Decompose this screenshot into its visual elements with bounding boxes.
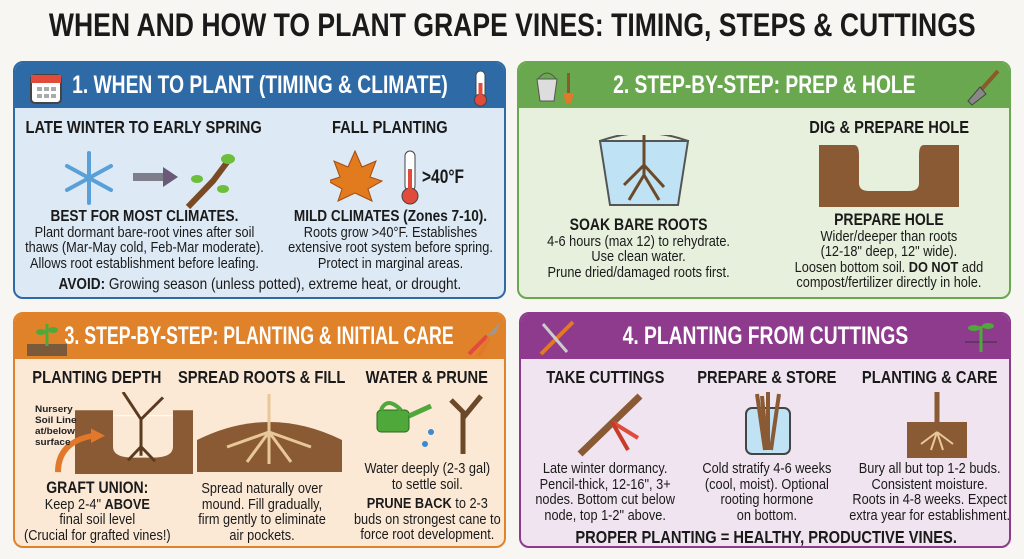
panel: planting from cuttings [519, 312, 1011, 548]
text: spread roots [198, 480, 326, 544]
icon: thermometer header [474, 70, 487, 106]
icon: seedling header right [965, 323, 997, 352]
header: cuttings [441, 314, 1024, 359]
text: soak bare roots [547, 216, 730, 280]
text: spread roots: Spread naturally over [201, 480, 323, 497]
text: prepare hole: Wider/deeper than roots [821, 228, 957, 244]
subheading: dig and prepare hole: DIG & PREPARE HOLE [809, 117, 969, 137]
text: graft union: GRAFT UNION: [46, 479, 148, 497]
header: planting and initial care [0, 314, 584, 359]
text: water and prune: buds on strongest cane to [354, 510, 500, 528]
text: best for most climates [25, 208, 263, 272]
icon: cutting in soil [907, 392, 967, 458]
text: water and prune: to settle soil. [392, 476, 462, 492]
text: take cuttings: nodes. Bottom cut below [535, 491, 675, 508]
text: mild climates: Roots grow >40°F. Establishes [303, 224, 477, 240]
text: planting and care: Roots in 4-8 weeks. Expect [853, 491, 1007, 508]
subheading: take cuttings: TAKE CUTTINGS [546, 367, 664, 387]
icon: watering can and cane [376, 394, 483, 454]
icon: shovel header [967, 70, 1000, 106]
text: mild climates [288, 208, 492, 272]
icon: cane and pruners [578, 394, 642, 456]
icon: mound with roots [197, 394, 342, 472]
header: when to plant: 1. WHEN TO PLANT (TIMING & CLIMATE) [72, 71, 447, 99]
icon: jar with cuttings [745, 392, 791, 455]
panel: when to plant [13, 61, 506, 299]
text: water and prune: Water deeply (2-3 gal) [364, 460, 490, 477]
icon: calendar [30, 74, 62, 104]
text: planting and care: Bury all but top 1-2 buds. [859, 460, 1001, 477]
text: planting and care [850, 460, 1010, 524]
header: planting and initial care: 3. STEP-BY-STEP: PLANTING & INITIAL CARE [65, 322, 454, 350]
icon: snowflake arrow branch [64, 151, 235, 209]
text: best for most climates: Plant dormant bare-root vines after soil [34, 224, 254, 240]
icon: pruners header left [540, 320, 574, 356]
text: soak bare roots: SOAK BARE ROOTS [570, 216, 708, 234]
text: prepare and store [703, 460, 831, 524]
subheading: water and prune: WATER & PRUNE [366, 367, 488, 387]
text: soak bare roots: Use clean water. [592, 248, 686, 265]
text: proper planting: PROPER PLANTING = HEALTHY, PRODUCTIVE VINES. [575, 527, 957, 547]
text: prepare and store: (cool, moist). Optional [705, 476, 829, 492]
text: water and prune: to 2-3 [455, 495, 488, 512]
panel: prep and hole [517, 61, 1011, 299]
subheading: fall planting: FALL PLANTING [332, 117, 448, 137]
text: water and prune: force root development. [360, 526, 494, 543]
icon: bucket header [536, 72, 574, 103]
icon: planting depth diagram: Nursery [35, 404, 73, 415]
icon: planting depth diagram [35, 392, 193, 474]
subheading: late winter: LATE WINTER TO EARLY SPRING [26, 117, 262, 137]
text: spread roots: mound. Fill gradually, [202, 496, 322, 512]
text: take cuttings [535, 460, 675, 524]
text: spread roots: air pockets. [229, 526, 295, 544]
text: mild climates: extensive root system before spring. [288, 239, 492, 256]
header: when to plant [0, 63, 584, 108]
icon: sprout header [27, 324, 67, 356]
text: planting and care: extra year for establishment. [850, 506, 1010, 524]
text: prepare hole: compost/fertilizer directly in hole. [797, 274, 981, 291]
icon: planting depth diagram: Soil Line [35, 415, 77, 426]
text: graft union [24, 479, 170, 544]
text: soak bare roots: 4-6 hours (max 12) to rehydrate. [548, 232, 730, 250]
header: cuttings: 4. PLANTING FROM CUTTINGS [622, 322, 908, 350]
text: prepare hole [795, 211, 983, 291]
subheading: prepare and store: PREPARE & STORE [697, 367, 837, 387]
text: spread roots: firm gently to eliminate [198, 511, 326, 528]
subheading: spread roots: SPREAD ROOTS & FILL [178, 367, 346, 387]
text: soak bare roots: Prune dried/damaged roots first. [548, 264, 730, 280]
subheading: planting and care: PLANTING & CARE [862, 367, 998, 387]
text: mild climates: Protect in marginal areas. [317, 254, 463, 272]
title: WHEN AND HOW TO PLANT GRAPE VINES: TIMING, STEPS & CUTTINGS [49, 7, 975, 43]
text: graft union: Keep 2-4" ABOVE [44, 496, 150, 512]
text: graft union: final soil level [59, 511, 135, 528]
icon: pruners header [468, 322, 501, 356]
text: mild climates: MILD CLIMATES (Zones 7-10). [293, 208, 487, 225]
text: prepare and store: Cold stratify 4-6 weeks [703, 460, 831, 477]
icon: planting depth diagram: at/below [35, 426, 76, 437]
panel: planting and initial care [13, 312, 506, 548]
text: water and prune: PRUNE BACK [366, 495, 451, 512]
text: take cuttings: Late winter dormancy. [543, 460, 667, 477]
icon: planting depth diagram: surface [35, 437, 71, 448]
text: avoid: AVOID: Growing season (unless potted), extreme heat, or drought. [59, 276, 461, 293]
text: prepare and store: rooting hormone [721, 491, 813, 508]
icon: hole [819, 145, 959, 207]
text: prepare hole: PREPARE HOLE [834, 211, 944, 229]
text: prepare hole: Loosen bottom soil. DO NOT add [795, 258, 983, 276]
icon: bucket with roots [598, 135, 690, 206]
text: take cuttings: Pencil-thick, 12-16", 3+ [539, 476, 671, 492]
icon: leaf and thermometer [330, 150, 464, 204]
header: prep and hole: 2. STEP-BY-STEP: PREP & HOLE [613, 71, 915, 99]
text: take cuttings: node, top 1-2" above. [544, 506, 666, 524]
text: planting and care: Consistent moisture. [872, 476, 988, 492]
text: graft union: (Crucial for grafted vines!) [24, 526, 170, 544]
header: prep and hole [439, 63, 1024, 108]
text: water and prune [354, 460, 500, 543]
text: prepare hole: (12-18" deep, 12" wide). [821, 243, 957, 260]
text: best for most climates: BEST FOR MOST CLIMATES. [50, 208, 238, 225]
subheading: planting depth: PLANTING DEPTH [32, 367, 162, 387]
text: best for most climates: thaws (Mar-May cold, Feb-Mar moderate). [25, 239, 263, 256]
text: prepare and store: on bottom. [737, 506, 797, 524]
text: best for most climates: Allows root establishment before leafing. [30, 254, 258, 272]
